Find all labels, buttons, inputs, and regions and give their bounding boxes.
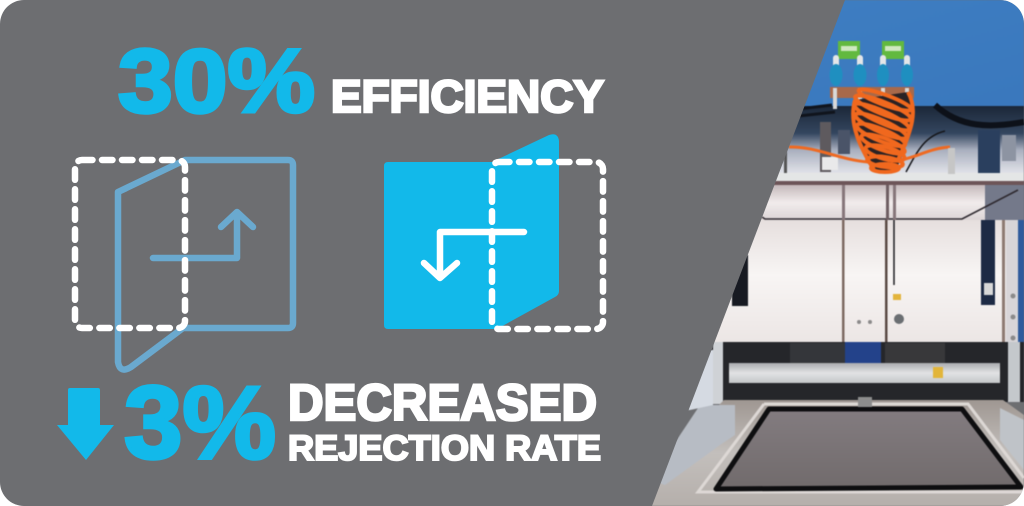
dark upper cavity bbox=[779, 102, 1024, 174]
blue machine housing bbox=[804, 0, 1024, 106]
side panels bbox=[714, 219, 1024, 343]
silver lower bar bbox=[729, 363, 1000, 383]
post bbox=[948, 148, 955, 174]
label: REJECTION RATE: REJECTION RATE bbox=[288, 429, 601, 468]
vacuum table bbox=[640, 397, 1024, 506]
mat with black seal bbox=[716, 409, 1021, 489]
icon: filled panel closing down bbox=[384, 134, 603, 329]
blue valves bbox=[830, 55, 913, 86]
machine photo bbox=[640, 0, 1024, 506]
upper crossbeam bbox=[761, 172, 1024, 221]
icon: down arrow bbox=[57, 388, 114, 460]
left white frame bbox=[684, 350, 713, 410]
green labels bbox=[838, 41, 904, 59]
statistic: 3%: 3% bbox=[124, 365, 276, 480]
headline: EFFICIENCY: EFFICIENCY bbox=[331, 71, 604, 122]
headline: 30%: 30% bbox=[118, 32, 315, 132]
orange side tubes bbox=[789, 147, 950, 162]
icon: outlined panel opening up bbox=[75, 160, 293, 370]
label: DECREASED: DECREASED bbox=[288, 374, 597, 431]
orange coiled hose bbox=[852, 86, 913, 172]
dark lower cavity bbox=[712, 341, 1024, 405]
manifold bbox=[830, 87, 914, 109]
